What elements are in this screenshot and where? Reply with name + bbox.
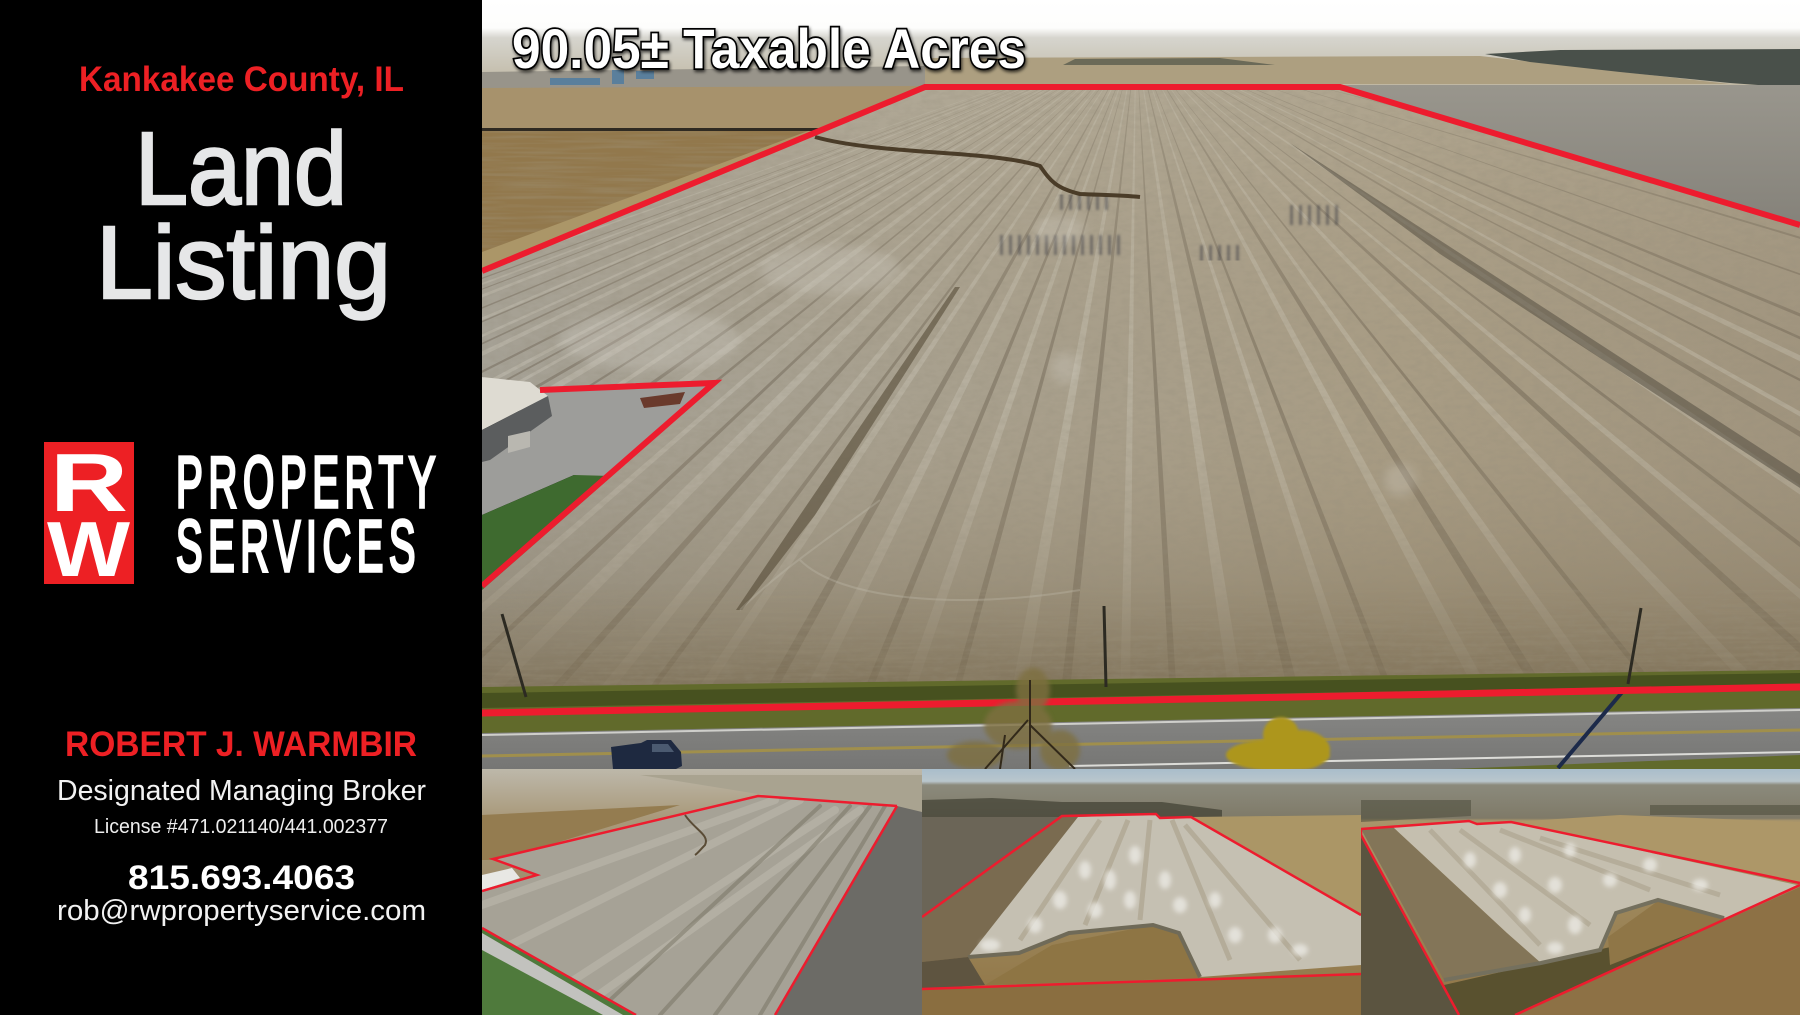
boundary (1361, 821, 1800, 1015)
dark streak clusters (1000, 200, 1340, 255)
title line 2: Listing (96, 205, 391, 320)
rocky pond edge (968, 925, 1200, 977)
building wall (482, 396, 552, 462)
distant tree cluster (922, 798, 1222, 817)
grass patch (482, 475, 612, 590)
tree clusters (1361, 800, 1800, 822)
logo word SERVICES: SERVICES (176, 507, 421, 587)
photo background (482, 769, 922, 1015)
title: land listing (96, 111, 391, 320)
gravel lot (482, 385, 714, 515)
white mottling (980, 846, 1308, 956)
grass shadow band (482, 673, 1800, 708)
light field (482, 796, 897, 1015)
road edge bottom (1069, 752, 1800, 766)
logo: RW Property Services (44, 436, 441, 593)
phone number: 815.693.4063 (128, 859, 355, 897)
dark wedge lower (1361, 835, 1459, 1015)
corn field left (482, 131, 808, 252)
panel: lower centre photo (922, 769, 1361, 1015)
parked trailer (508, 431, 530, 453)
panel: black sidebar background (0, 0, 482, 1015)
furrow stripes (480, 800, 885, 1015)
tan left field (482, 805, 680, 860)
license number: License #471.021140/441.002377 (94, 816, 388, 838)
photo background (922, 769, 1361, 1015)
utility poles (502, 606, 1641, 697)
email address: rob@rwpropertyservice.com (57, 895, 426, 927)
tan right field (1511, 815, 1800, 883)
boundary line along the road (482, 687, 1800, 713)
dark field divider (482, 128, 822, 131)
truck (611, 740, 682, 769)
dark upper left field (922, 817, 1062, 917)
distant tan band (925, 56, 1730, 84)
tan right field (1191, 815, 1361, 915)
dark furrow fan (482, 90, 1800, 667)
photo background (1361, 769, 1800, 1015)
tan strip along boundary (482, 131, 811, 268)
panel: lower right photo (1361, 769, 1800, 1015)
pole shadow (1558, 690, 1624, 768)
bare tree (947, 668, 1080, 770)
left lower field (922, 957, 985, 989)
pale washed patches (560, 216, 1416, 496)
distant gray farmland left (482, 66, 925, 88)
rocky pond edge (1444, 900, 1724, 980)
bright field (1393, 821, 1797, 963)
dark right field (775, 806, 922, 1015)
drainage gully (815, 137, 1140, 197)
contact block (57, 725, 426, 927)
tan field stripes (1430, 830, 1720, 945)
logo word PROPERTY: PROPERTY (176, 443, 441, 523)
boundary (922, 814, 1361, 989)
roadside grass (482, 670, 1800, 769)
hazy gray fields top (640, 775, 922, 812)
panel: main aerial photo (482, 0, 1800, 769)
road surface (482, 708, 1800, 769)
yellow centre line (482, 730, 1800, 756)
title line 1: Land (135, 111, 347, 226)
logo letter R: R (50, 436, 128, 529)
road and green lawn (482, 928, 636, 1015)
distant tree line right (1485, 49, 1800, 88)
tire track curves at bottom (740, 500, 1080, 610)
corn field stripes (482, 131, 790, 248)
building and gravel lot (482, 377, 714, 590)
farm buildings (550, 70, 654, 85)
logo red block (44, 442, 134, 584)
brown pond field (1608, 901, 1724, 965)
small building (482, 868, 520, 890)
broker title: Designated Managing Broker (57, 775, 426, 807)
dark track bands (736, 287, 960, 610)
tan field stripes (1020, 820, 1300, 960)
bottom field horizontal texture (482, 590, 1800, 690)
panel: lower left photo (480, 769, 922, 1015)
bright field (968, 814, 1361, 977)
farm equipment (640, 392, 685, 408)
light furrow fan (482, 90, 1800, 640)
heading: taxable acres: 90.05± Taxable Acres (512, 17, 1026, 80)
field base (482, 90, 1800, 687)
broker name: ROBERT J. WARMBIR (65, 725, 417, 764)
bottom crop field (922, 974, 1361, 1015)
small gully (685, 815, 706, 855)
brown pond field (985, 925, 1200, 985)
logo letter W: W (47, 505, 130, 593)
road edge top (482, 710, 1800, 735)
distant tree line centre (1063, 58, 1275, 65)
yellow tree (1226, 717, 1330, 771)
boundary line on main photo (482, 87, 1800, 586)
darker left field (922, 816, 1090, 962)
field texture (514, 128, 1150, 472)
gray neighbouring field (1340, 85, 1800, 225)
boundary (482, 796, 897, 1015)
crop field lower right (1515, 887, 1800, 1015)
scrub strip (1444, 921, 1724, 1015)
darker left field (1361, 827, 1541, 980)
location heading: Kankakee County, IL (79, 60, 404, 99)
building roof (482, 377, 548, 430)
distant tan field left (482, 86, 925, 131)
sky and distant farmland (482, 0, 1800, 85)
white mottling (1464, 843, 1708, 954)
